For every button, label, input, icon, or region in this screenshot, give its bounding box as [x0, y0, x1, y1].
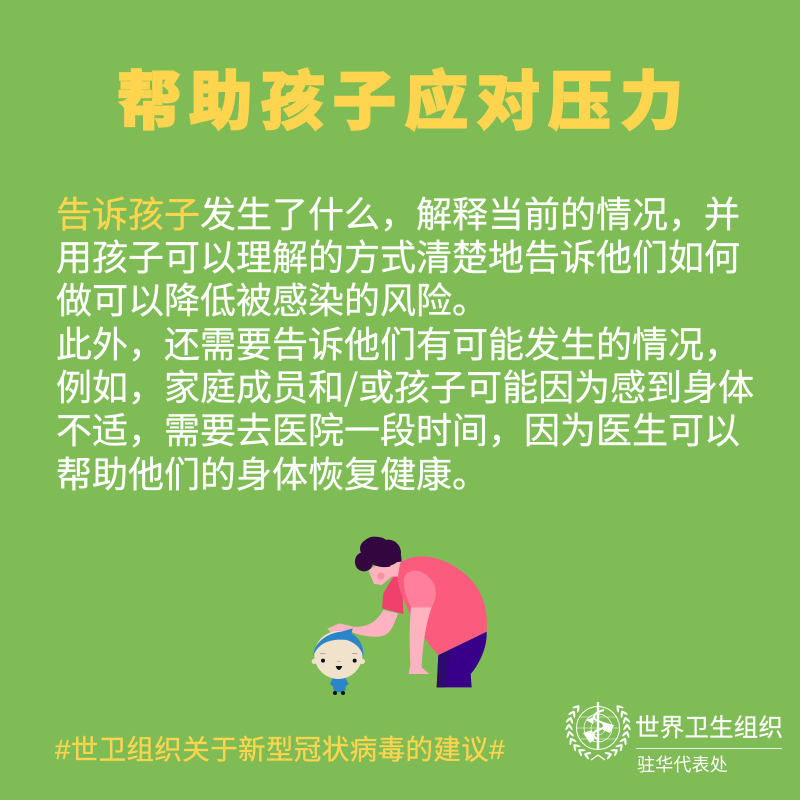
text block: explanation: 用孩子可以理解的方式清楚地告诉他们如何 [56, 237, 740, 278]
logo text: China office: 驻华代表处 [637, 755, 728, 775]
title: 帮助孩子应对压力 [117, 66, 691, 138]
text block: explanation: 告诉孩子发生了什么，解释当前的情况，并 [56, 194, 740, 235]
hashtag: #世卫组织关于新型冠状病毒的建议# [55, 734, 505, 765]
divider [636, 748, 782, 749]
text block: explanation: 此外，还需要告诉他们有可能发生的情况， [56, 324, 740, 365]
child [312, 628, 365, 695]
text block: explanation: 帮助他们的身体恢复健康。 [56, 454, 488, 495]
illustration: mother touching child's head [312, 536, 487, 695]
text block: explanation: 不适，需要去医院一段时间，因为医生可以 [56, 410, 740, 451]
text block: explanation [56, 194, 754, 495]
text block: explanation: 例如，家庭成员和/或孩子可能因为感到身体 [56, 359, 754, 411]
logo: WHO emblem [565, 702, 631, 760]
mother [327, 537, 487, 687]
text block: explanation: 做可以降低被感染的风险。 [56, 280, 488, 321]
logo text: organisation name: 世界卫生组织 [635, 715, 783, 742]
